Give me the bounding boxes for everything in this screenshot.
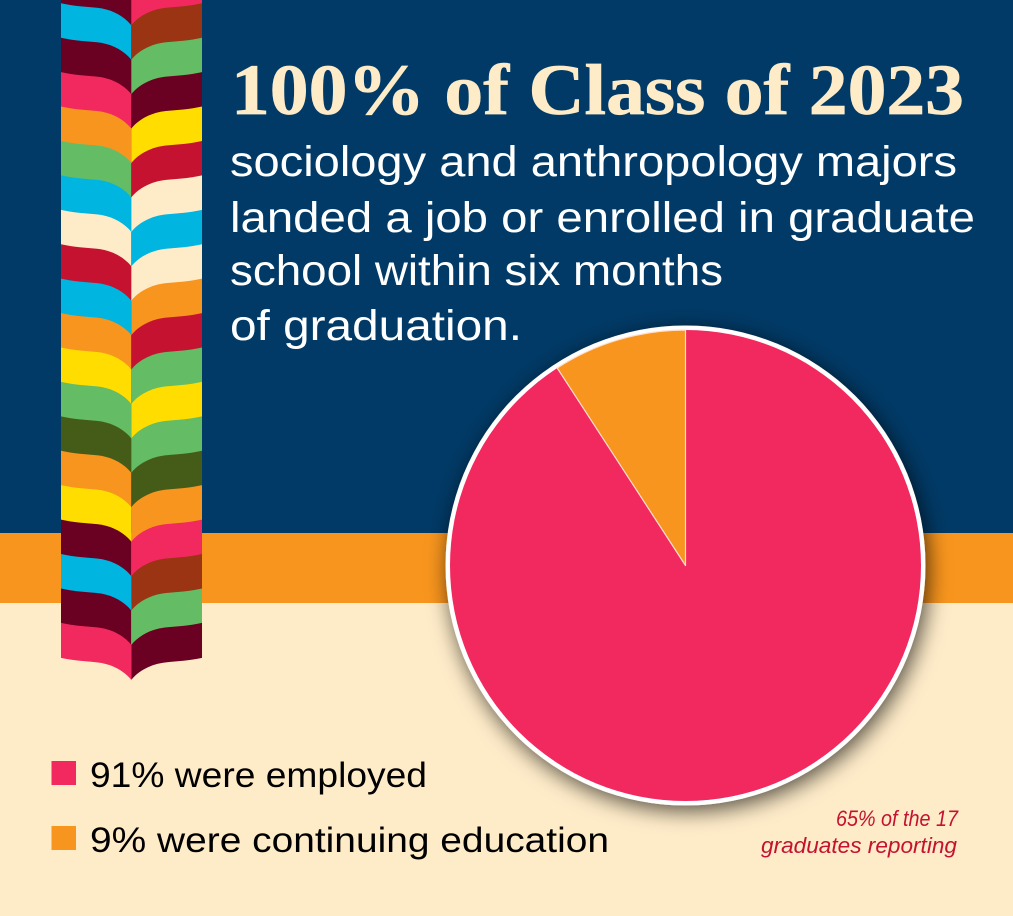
intro text block: of graduation. — [230, 302, 522, 350]
legend swatch: employed — [52, 761, 76, 785]
pie: white rim with shadow — [446, 326, 926, 806]
pie chart — [446, 326, 926, 806]
intro text block: school within six months — [230, 247, 723, 295]
background: cream panel — [0, 603, 1013, 916]
footnote: graduates reporting — [761, 833, 958, 858]
intro text block: landed a job or enrolled in graduate — [230, 194, 975, 242]
legend label: employed: 91% were employed — [90, 756, 427, 795]
background: orange band — [0, 533, 1013, 603]
pie slice: 91% employed — [450, 330, 921, 801]
pie slice: 9% continuing education — [557, 330, 686, 566]
ribbon: right column — [131, 0, 202, 680]
intro text block: sociology and anthropology majors — [230, 138, 957, 186]
footnote: 65% of the 17 — [836, 806, 959, 831]
legend — [52, 756, 609, 860]
legend label: continuing education: 9% were continuing education — [90, 821, 609, 860]
ribbon: left column — [61, 0, 131, 680]
decorative ribbon — [61, 0, 202, 680]
title: 100% of Class of 2023 — [231, 50, 964, 130]
background: navy panel — [0, 0, 1013, 533]
intro text block — [230, 138, 975, 350]
legend swatch: continuing education — [52, 826, 76, 850]
footnote — [761, 806, 959, 858]
